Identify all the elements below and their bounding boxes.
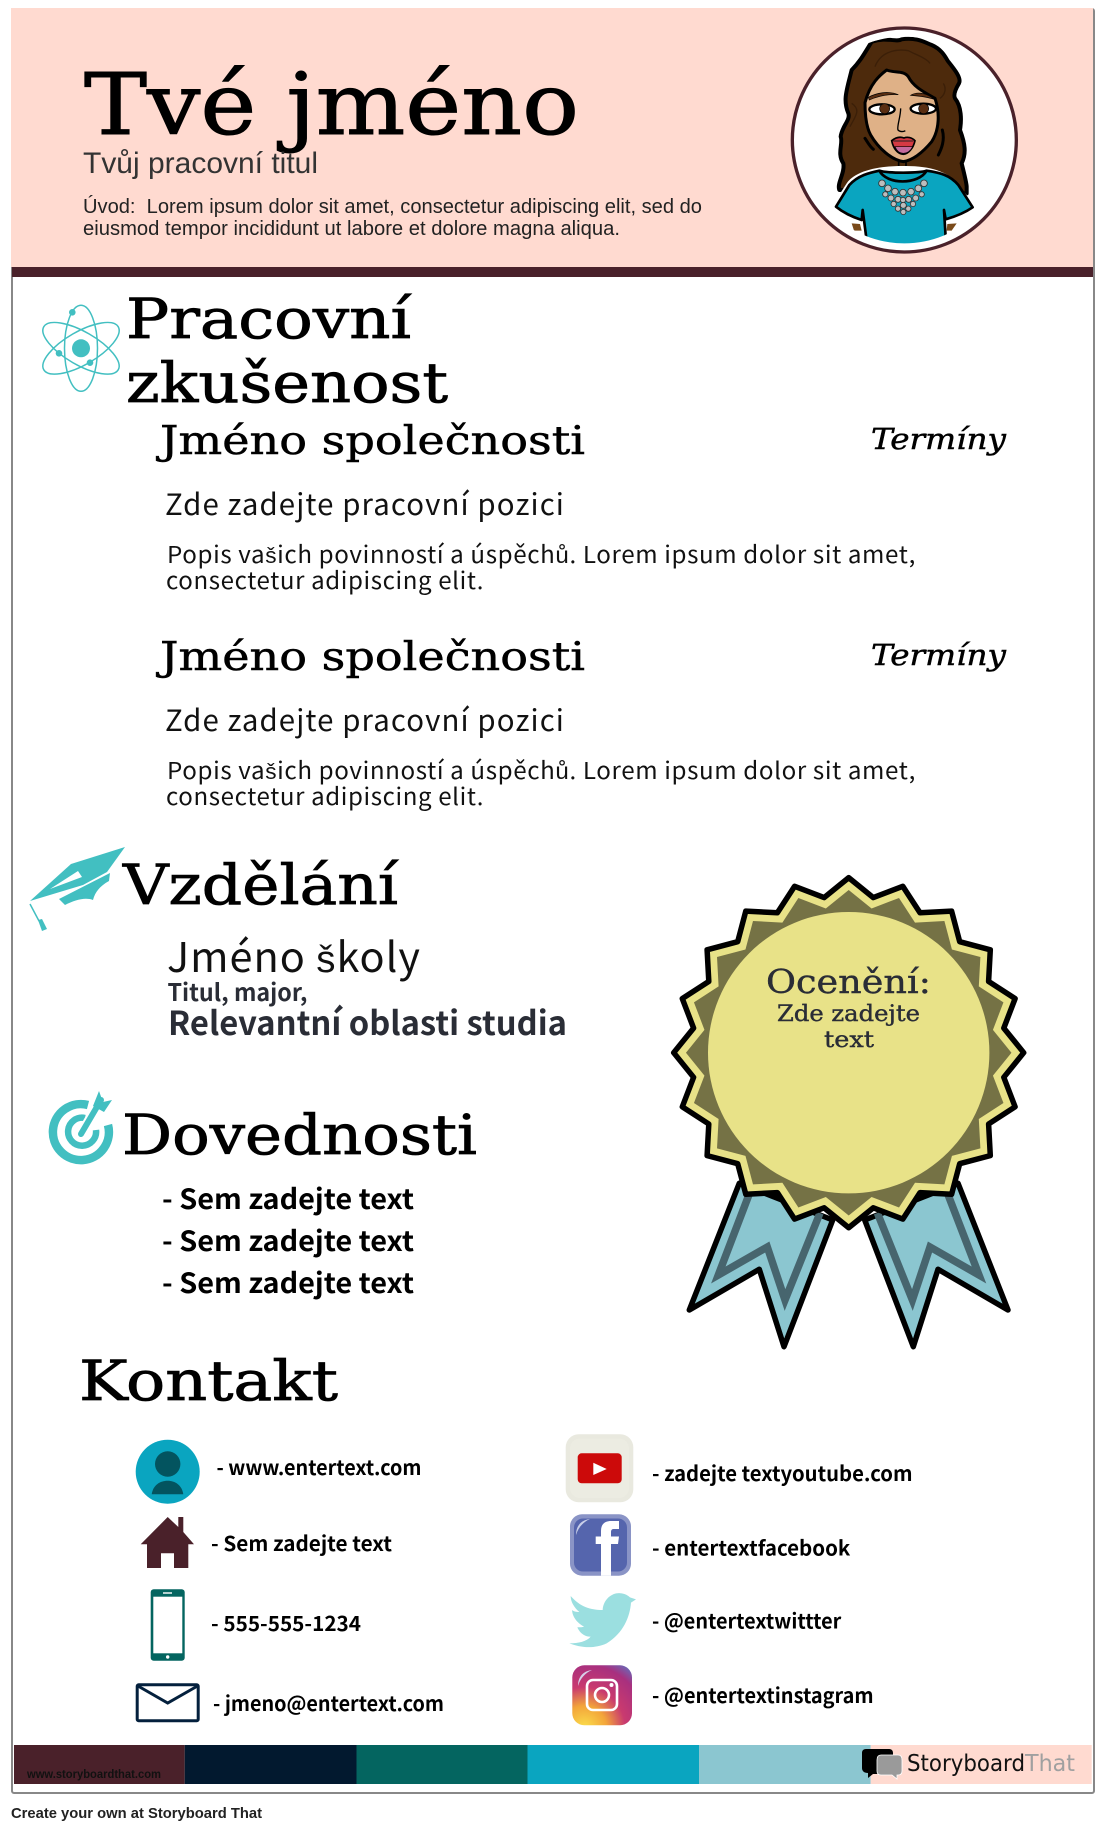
job entry 2: [155, 635, 1007, 812]
contact: website: - www.entertext.com: [216, 1451, 422, 1481]
heading: work experience: Pracovní: [126, 287, 411, 351]
icon: person: [136, 1440, 200, 1504]
contact: email: - jmeno@entertext.com: [213, 1687, 444, 1717]
contact: youtube: - zadejte textyoutube.com: [652, 1457, 912, 1487]
icon: target: [53, 1091, 112, 1160]
icon: youtube: [566, 1434, 633, 1502]
skills list: - Sem zadejte text: [162, 1178, 414, 1218]
award text: Zde zadejte: [777, 1002, 920, 1027]
icon: atom: [36, 305, 126, 391]
icon: facebook: [570, 1514, 631, 1576]
award text: [766, 962, 931, 1053]
job description: Popis vašich povinností a úspěchů. Lorem ipsum dolor sit amet,: [167, 752, 916, 786]
icon: graduation cap: [30, 847, 125, 931]
intro text: Úvod: Lorem ipsum dolor sit amet, consectetur adipiscing elit, sed do: [83, 195, 702, 218]
job position: Zde zadejte pracovní pozici: [165, 482, 565, 524]
storyboard that logo: Storyboard: [907, 1751, 1025, 1777]
rosette: [674, 878, 1024, 1228]
award badge: [674, 878, 1024, 1347]
contact: facebook: - entertextfacebook: [652, 1532, 851, 1562]
award text: text: [824, 1028, 874, 1053]
job title: Tvůj pracovní titul: [83, 147, 318, 180]
job position: Zde zadejte pracovní pozici: [165, 698, 565, 740]
icon: phone: [151, 1589, 185, 1661]
icon: house: [141, 1517, 194, 1568]
intro text: eiusmod tempor incididunt ut labore et dolore magna aliqua.: [83, 218, 620, 240]
heading: contact: Kontakt: [79, 1349, 338, 1413]
contact: instagram: - @entertextinstagram: [652, 1679, 874, 1709]
credit line: Create your own at Storyboard That: [11, 1805, 262, 1822]
company name: Jméno společnosti: [155, 635, 585, 680]
contact: phone number: - 555-555-1234: [211, 1607, 361, 1637]
avatar portrait: [792, 28, 1016, 253]
dates: Termíny: [871, 638, 1007, 672]
school name: Jméno školy: [167, 924, 421, 984]
panel: header: [11, 8, 1093, 277]
contact: twitter: - @entertextwittter: [652, 1604, 841, 1634]
contact: address: - Sem zadejte text: [211, 1527, 392, 1557]
skills list: [162, 1178, 414, 1302]
job description: [166, 536, 916, 596]
company name: Jméno společnosti: [155, 419, 585, 464]
intro text: [83, 195, 702, 240]
footer colour strip: [14, 1745, 1092, 1784]
footer url: www.storyboardthat.com: [26, 1767, 161, 1781]
icon: instagram: [572, 1665, 632, 1725]
field of study: Relevantní oblasti studia: [168, 997, 567, 1045]
degree: Titul, major,: [168, 973, 308, 1008]
skills list: - Sem zadejte text: [162, 1220, 414, 1260]
job entry 1: [155, 419, 1007, 596]
heading: work experience: zkušenost: [126, 351, 448, 415]
heading: education: Vzdělání: [122, 853, 398, 917]
education details: [167, 924, 567, 1045]
icon: envelope: [137, 1685, 198, 1721]
job description: consectetur adipiscing elit.: [166, 562, 484, 596]
job description: [166, 752, 916, 812]
dates: Termíny: [871, 422, 1007, 456]
title: Tvé jméno: [84, 56, 579, 155]
job description: consectetur adipiscing elit.: [166, 778, 484, 812]
skills list: - Sem zadejte text: [162, 1262, 414, 1302]
ribbons: [689, 1183, 1008, 1347]
icon: twitter: [569, 1593, 636, 1647]
heading: skills: Dovednosti: [122, 1103, 477, 1167]
storyboard that logo: That: [1024, 1751, 1075, 1777]
storyboard that logo: [862, 1749, 1075, 1779]
award text: Ocenění:: [766, 962, 931, 1001]
heading: work experience: [126, 287, 448, 415]
job description: Popis vašich povinností a úspěchů. Lorem ipsum dolor sit amet,: [167, 536, 916, 570]
